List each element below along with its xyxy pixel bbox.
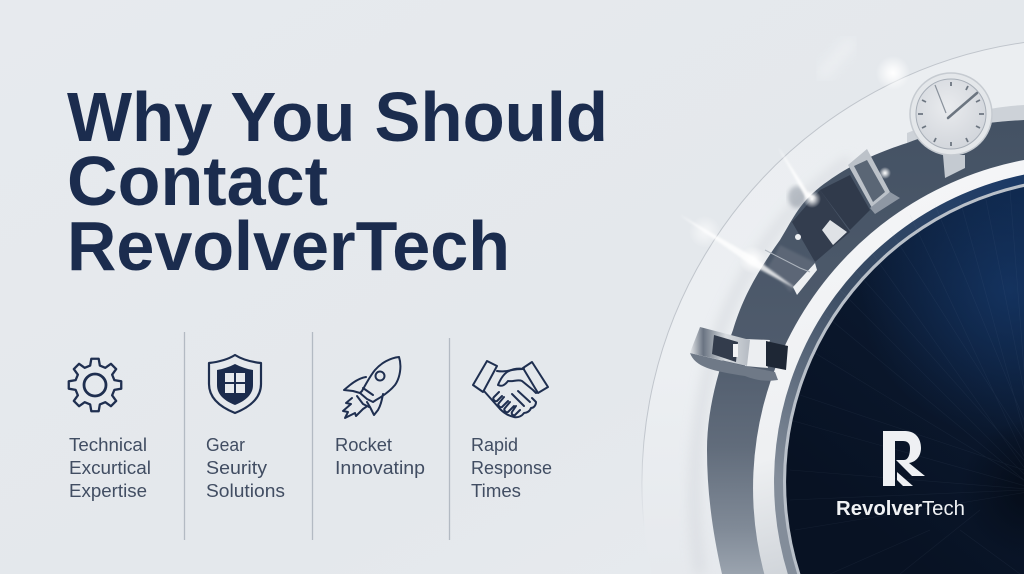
- panel: technical expertise: [69, 359, 151, 501]
- icon: rocket: [343, 357, 400, 418]
- label: rapid response: Times: [471, 480, 521, 501]
- icon: handshake: [473, 361, 548, 417]
- label: rocket innovation: Innovatinp: [335, 457, 425, 478]
- label: technical expertise: Expertise: [69, 480, 147, 501]
- dark disc: [786, 187, 1024, 574]
- logo wordmark: RevolverTech: [836, 498, 965, 520]
- panel: rocket innovation: [335, 357, 425, 478]
- label: security solutions: Seurity: [206, 457, 268, 478]
- label: security solutions: [206, 434, 285, 501]
- label: security solutions: Solutions: [206, 480, 285, 501]
- dark instrument band: [707, 105, 1024, 574]
- clock: [910, 73, 992, 178]
- glass outer ring: [642, 42, 1024, 574]
- label: technical expertise: Excurtical: [69, 457, 151, 478]
- dividers: [184, 332, 450, 540]
- panel: security solutions: [206, 355, 285, 501]
- icon: shield: [209, 355, 261, 413]
- icon: gear: [69, 359, 121, 411]
- label: technical expertise: [69, 434, 151, 501]
- light flares: [680, 40, 910, 290]
- panel: rapid response: [471, 361, 552, 501]
- icon: R mark: [883, 431, 925, 486]
- white inner ring: [753, 160, 1024, 574]
- label: rapid response: Rapid: [471, 434, 518, 455]
- label: rapid response: [471, 434, 552, 501]
- label: security solutions: Gear: [206, 434, 245, 455]
- title: [67, 78, 608, 285]
- title: Contact: [67, 142, 328, 220]
- logo: [836, 431, 965, 520]
- label: rapid response: Response: [471, 457, 552, 478]
- band hardware: [765, 149, 900, 295]
- title: RevolverTech: [67, 207, 510, 285]
- label: technical expertise: Technical: [69, 434, 147, 455]
- bracket: [690, 327, 788, 381]
- dial graphic: [642, 40, 1024, 574]
- title: Why You Should: [67, 78, 608, 156]
- label: rocket innovation: Rocket: [335, 434, 392, 455]
- label: rocket innovation: [335, 434, 425, 478]
